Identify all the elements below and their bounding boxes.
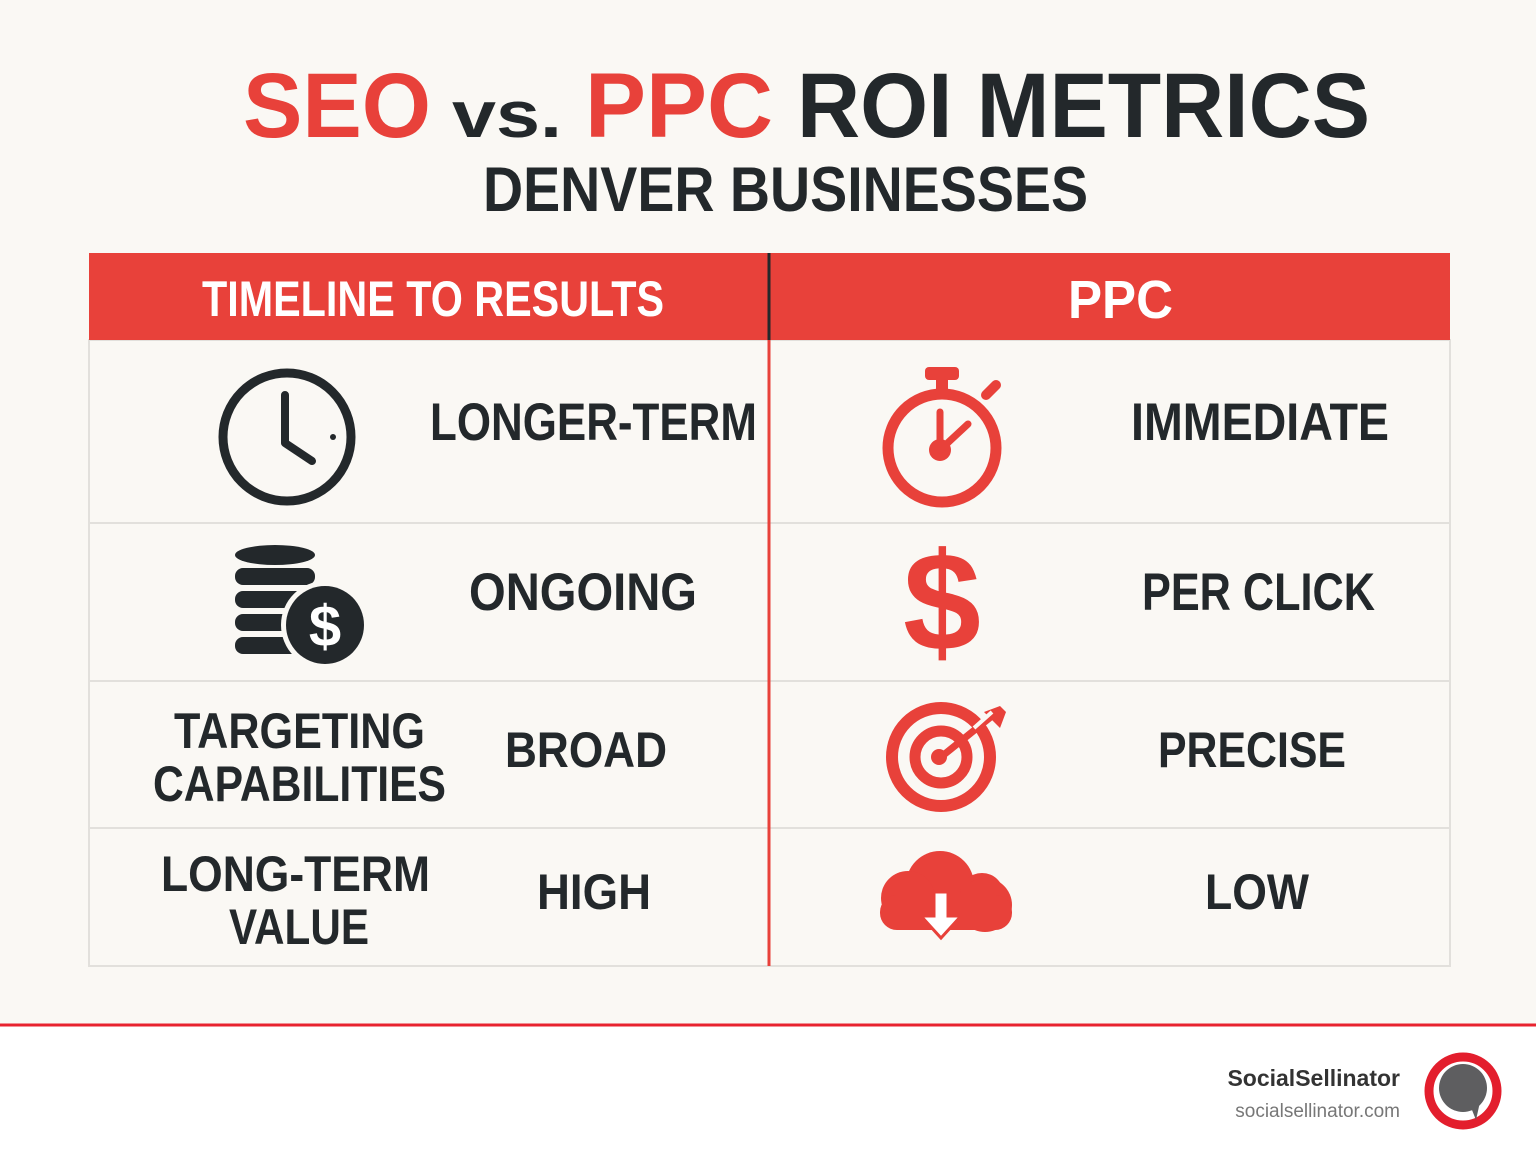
row 2 (235, 523, 1375, 680)
row 2: PER CLICK (1142, 563, 1375, 622)
footer: SocialSellinator (1227, 1065, 1400, 1091)
icon: coins with dollar: $ (309, 594, 341, 659)
row 2: ONGOING (469, 563, 697, 622)
title: SEO (243, 55, 431, 157)
header bar (89, 253, 1450, 340)
icon: stopwatch (888, 367, 996, 502)
subtitle: DENVER BUSINESSES (483, 155, 1088, 225)
logo (1429, 1057, 1497, 1125)
icon: coins with dollar (235, 545, 369, 669)
row 1: IMMEDIATE (1131, 393, 1389, 452)
icon: clock (223, 373, 351, 501)
row 4: LOW (1205, 864, 1310, 920)
icon: target (892, 706, 1006, 806)
title (243, 55, 1370, 157)
header bar: PPC (1068, 270, 1173, 330)
title: ROI METRICS (797, 55, 1370, 157)
row 1: LONGER-TERM (430, 393, 757, 452)
row 4: LONG-TERM (161, 846, 430, 902)
row 4 (161, 846, 1310, 955)
row 3: BROAD (505, 722, 667, 778)
row 3 (153, 703, 1346, 812)
header bar: TIMELINE TO RESULTS (202, 271, 664, 327)
row 3: PRECISE (1158, 722, 1346, 778)
title: vs. (452, 77, 562, 151)
row 1 (223, 367, 1389, 502)
row 3: CAPABILITIES (153, 756, 446, 812)
icon: dollar sign: $ (903, 523, 981, 680)
row 3: TARGETING (174, 703, 425, 759)
table (89, 253, 1450, 966)
row 4: VALUE (229, 899, 369, 955)
footer: socialsellinator.com (1235, 1101, 1400, 1122)
row 4: HIGH (537, 864, 651, 920)
footer (0, 1025, 1536, 1154)
title: PPC (585, 55, 773, 157)
icon: cloud download (880, 851, 1012, 938)
